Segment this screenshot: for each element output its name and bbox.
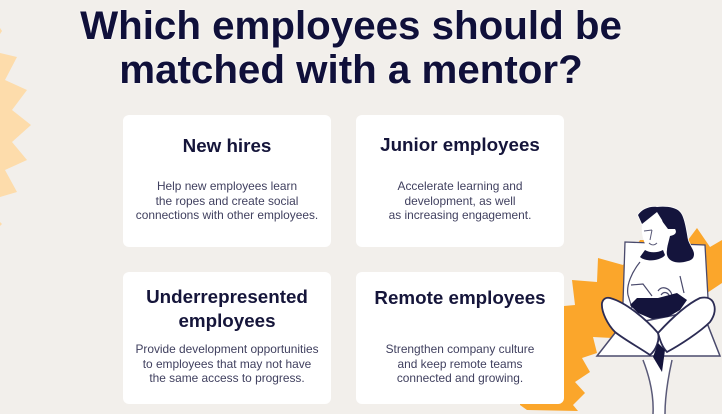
torso [628,258,686,308]
title: Which employees should be [80,3,622,48]
text: underrepresented employees: to employees that may not have [143,357,311,371]
face outline details [644,230,657,245]
face [642,213,676,250]
chair back [623,242,708,330]
card: remote employees [356,272,564,404]
right leg [658,297,715,352]
text: junior employees: development, as well [404,194,516,208]
right edge strip [722,0,725,414]
skirt [630,293,687,319]
text: remote employees: Strengthen company culture [386,342,534,356]
text: new hires: Help new employees learn [157,179,297,193]
left leg [602,298,659,355]
text: junior employees: as increasing engagement. [389,208,531,222]
hair [638,207,694,262]
text: remote employees: connected and growing. [397,371,523,385]
text: new hires: the ropes and create social [156,194,298,208]
chair legs [643,360,672,414]
heading: junior employees: Junior employees [380,134,540,155]
text: junior employees [389,179,531,222]
card: junior employees [356,115,564,247]
card: underrepresented employees [123,272,331,404]
chair seat [597,310,720,356]
text: remote employees: and keep remote teams [398,357,522,371]
heading: underrepresented employees: Underrepresented [146,286,308,307]
collar [640,250,665,260]
card: new hires [123,115,331,247]
heading: new hires: New hires [183,135,271,156]
text: new hires [136,179,318,222]
text: new hires: connections with other employees. [136,208,318,222]
title: matched with a mentor? [119,47,583,92]
heading: underrepresented employees: employees [178,310,276,331]
title [80,3,622,92]
text: underrepresented employees: the same access to progress. [149,371,305,385]
heading: remote employees: Remote employees [374,287,546,308]
text: underrepresented employees [135,342,319,385]
heading: underrepresented employees [146,286,308,331]
foot [653,343,665,372]
text: underrepresented employees: Provide development opportunities [135,342,319,356]
text: remote employees [386,342,534,385]
text: junior employees: Accelerate learning and [398,179,522,193]
arm and hand [631,284,672,297]
